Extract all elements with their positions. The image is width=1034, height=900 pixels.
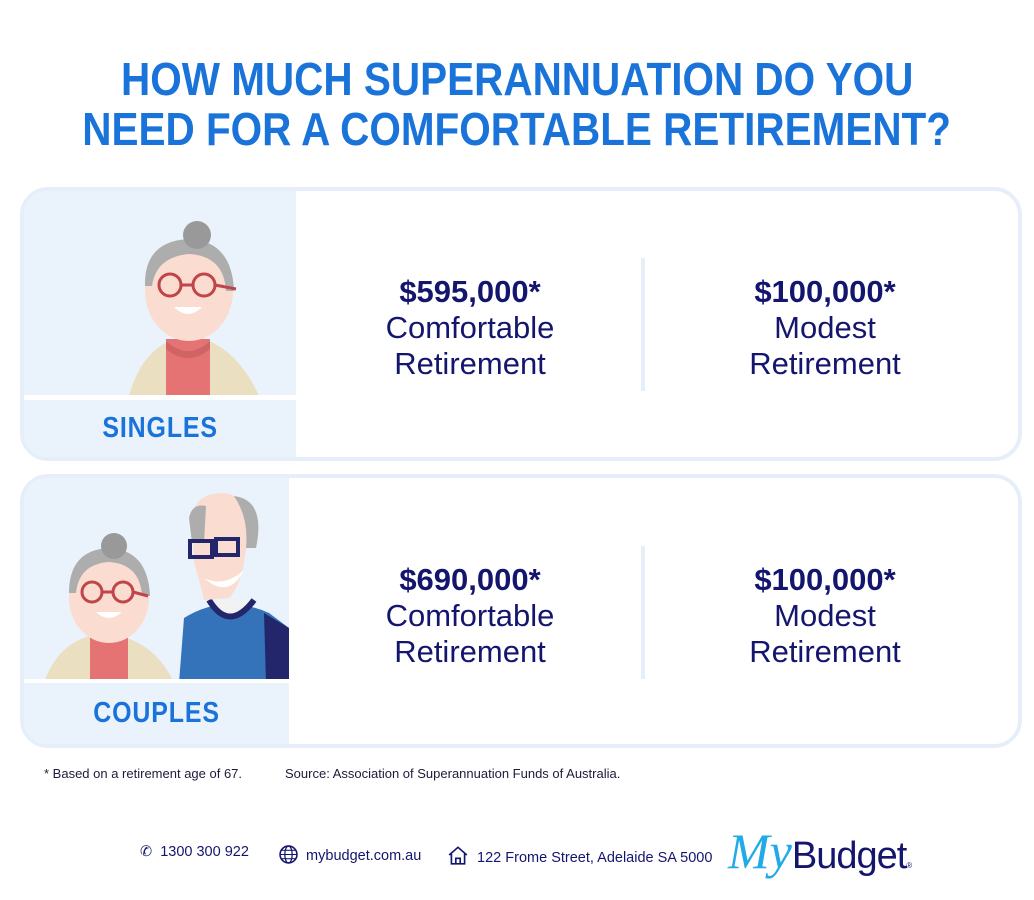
panel: couples (20, 474, 1022, 748)
label: couples: COUPLES (93, 697, 220, 729)
value: comfortable couples (386, 562, 554, 669)
value: modest couples (749, 562, 901, 669)
value: modest couples: Modest (774, 598, 876, 633)
title: HOW MUCH SUPERANNUATION DO YOU (121, 53, 913, 105)
value: comfortable couples: Retirement (394, 634, 546, 669)
value: comfortable singles: Retirement (394, 346, 546, 381)
divider (641, 258, 645, 391)
footer: website (279, 845, 421, 864)
icon: couple (46, 493, 289, 679)
title: NEED FOR A COMFORTABLE RETIREMENT? (83, 103, 951, 155)
label: singles: SINGLES (102, 412, 218, 444)
logo: MyBudget® (728, 823, 912, 879)
value: modest couples: Retirement (749, 634, 901, 669)
footer: phone: ✆ 1300 300 922 (140, 844, 249, 860)
value: comfortable couples: Comfortable (386, 598, 554, 633)
singles image area (24, 191, 296, 457)
value: modest singles: Retirement (749, 346, 901, 381)
icon: grandmother (129, 221, 258, 395)
value: comfortable singles: Comfortable (386, 310, 554, 345)
title (83, 53, 951, 155)
divider (641, 546, 645, 679)
value: modest singles: Modest (774, 310, 876, 345)
footer: website: mybudget.com.au (306, 848, 421, 864)
label: couples (24, 679, 289, 744)
value: comfortable singles (386, 274, 554, 381)
couples image area (24, 478, 289, 744)
footer: address: 122 Frome Street, Adelaide SA 5000 (477, 850, 712, 866)
value: modest singles: $100,000* (754, 274, 896, 309)
footnote: * Based on a retirement age of 67. Source: Association of Superannuation Funds of Australia. (44, 766, 620, 781)
label: singles (24, 395, 296, 457)
panel: singles (20, 187, 1022, 461)
value: modest couples: $100,000* (754, 562, 896, 597)
value: comfortable couples: $690,000* (399, 562, 541, 597)
value: modest singles (749, 274, 901, 381)
value: comfortable singles: $595,000* (399, 274, 541, 309)
